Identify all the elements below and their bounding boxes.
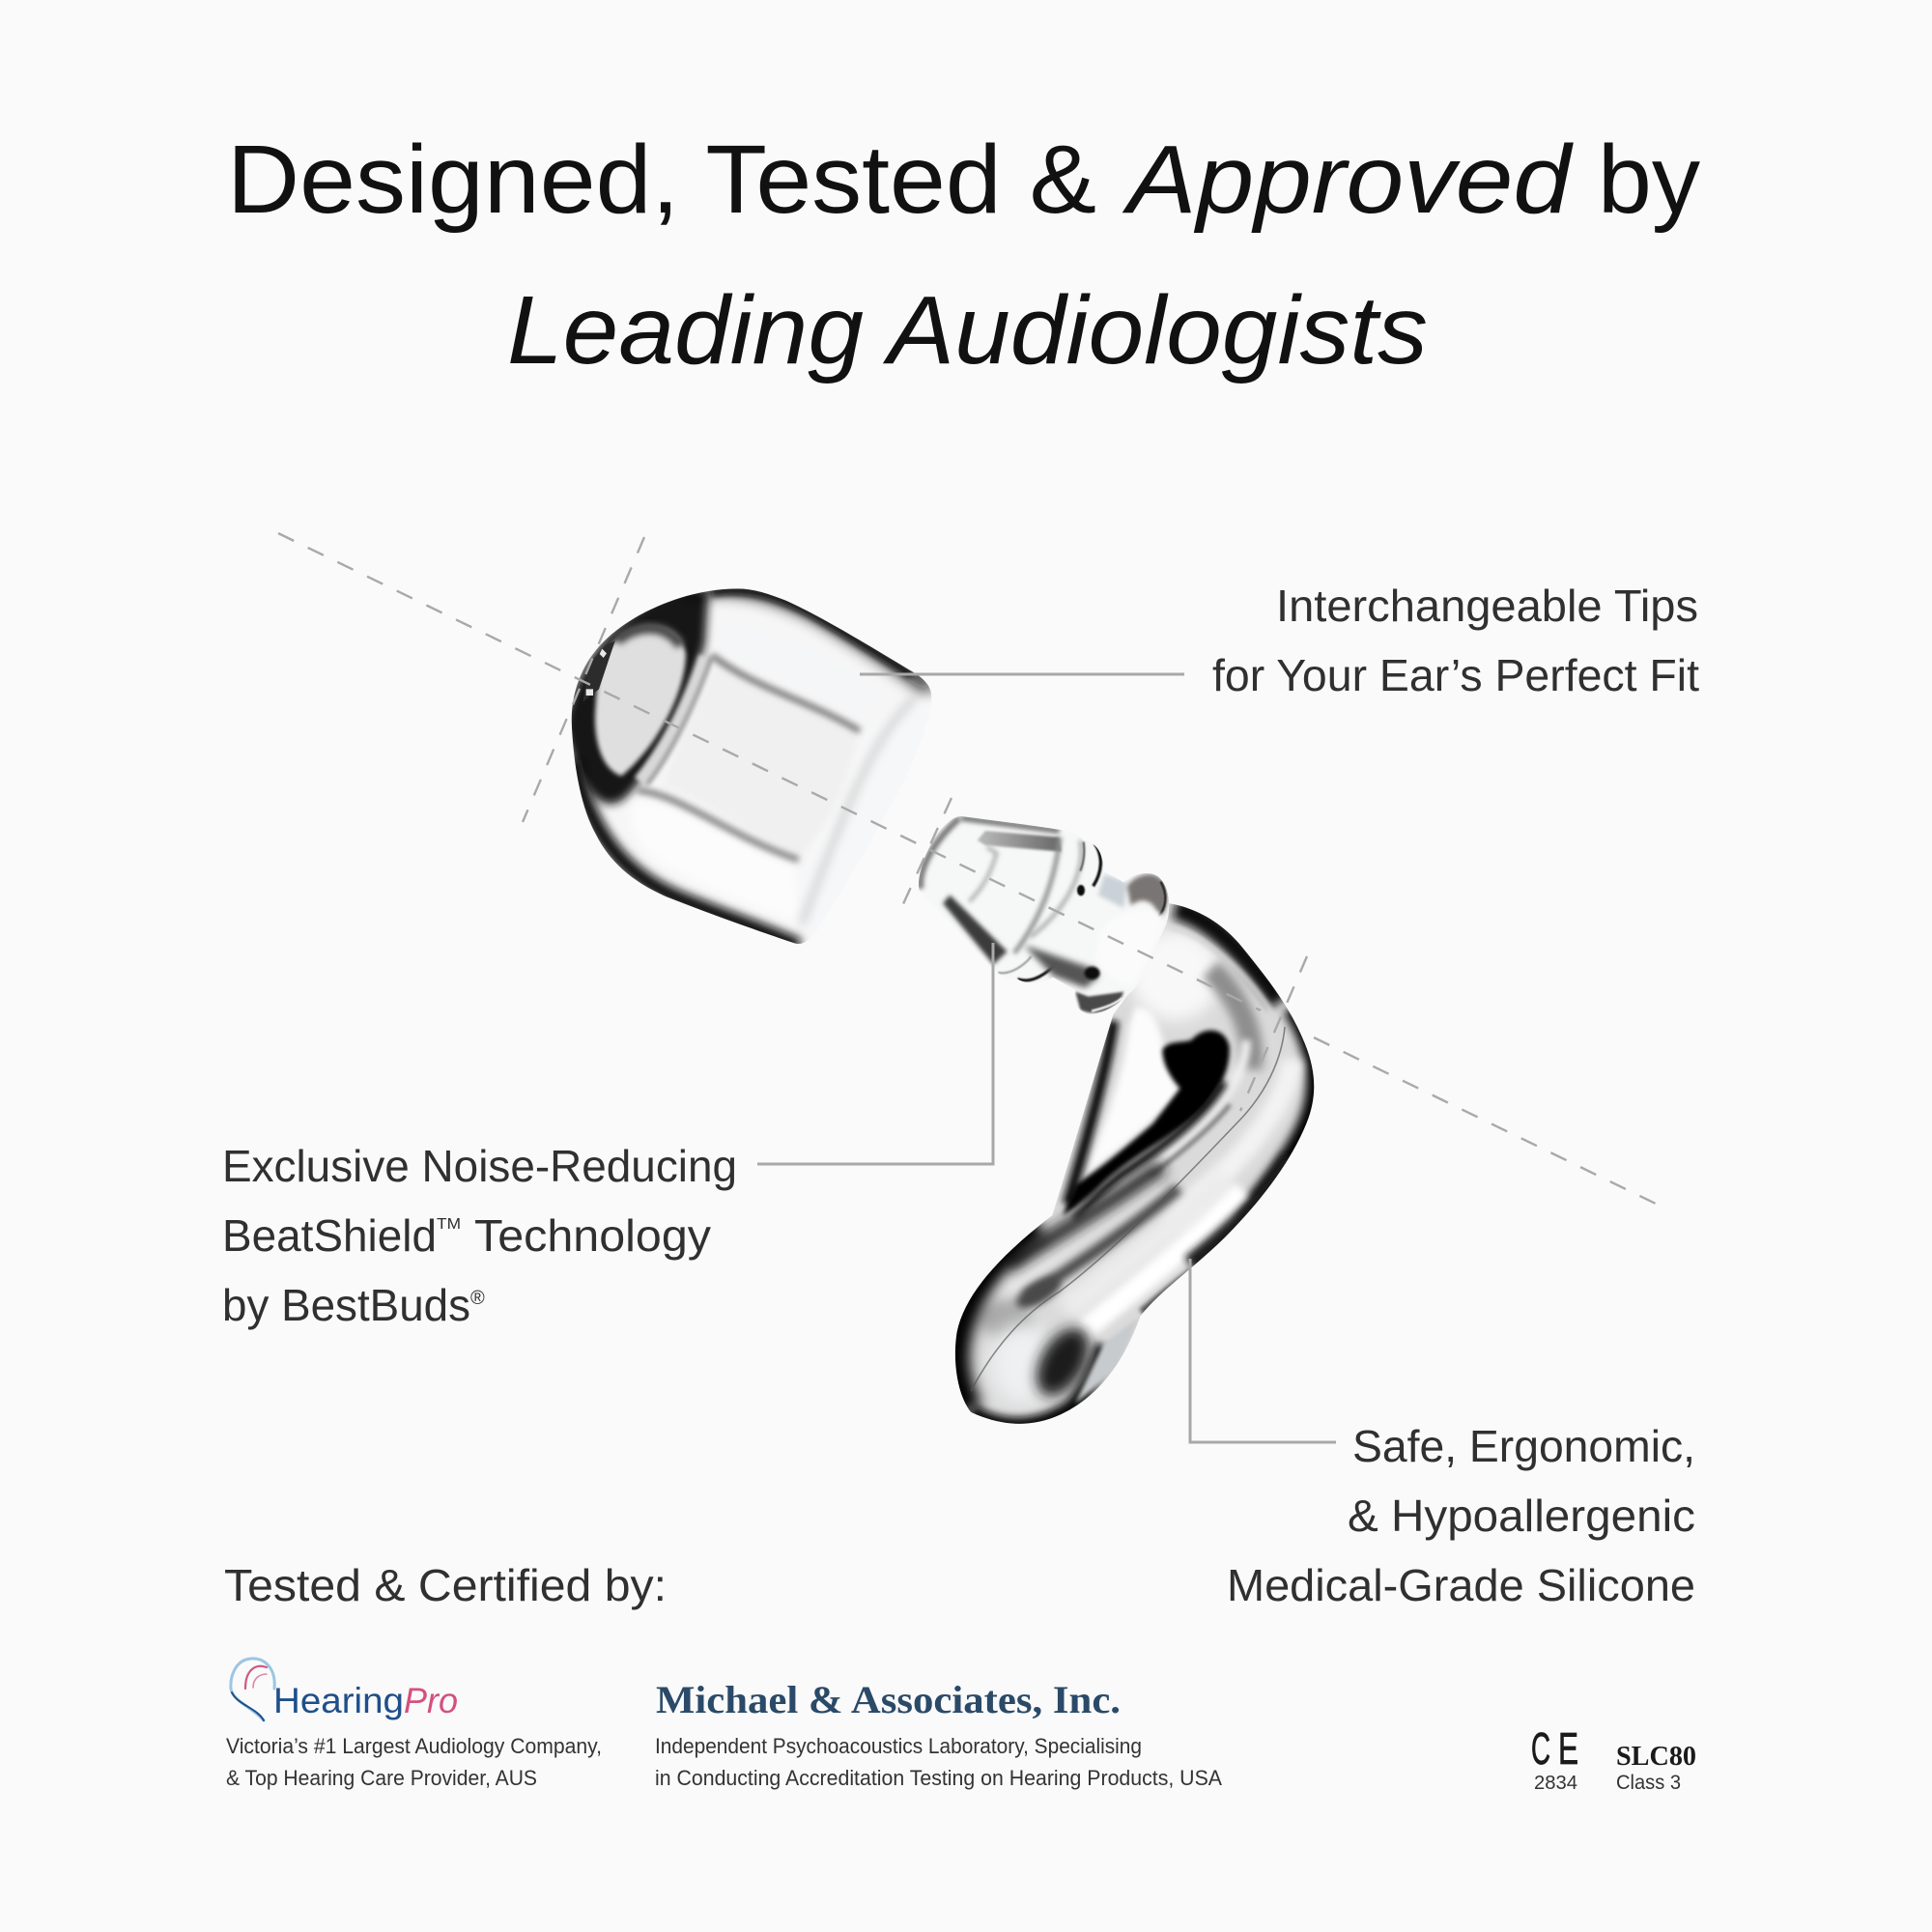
tip dark lower edge: [573, 760, 799, 947]
tip open end: [800, 703, 937, 944]
callout: interchangeable tips: for Your Ear’s Perfect Fit: [1212, 650, 1699, 700]
title line 2: Leading Audiologists: [507, 276, 1428, 384]
tip rim band: [640, 657, 707, 782]
body hook shading: [1210, 969, 1252, 1069]
body dark stripe: [1075, 1082, 1224, 1220]
tip dark upper rim: [712, 590, 911, 674]
logo: HearingPro: [231, 1659, 458, 1720]
callout: medical-grade silicone: Safe, Ergonomic,: [1352, 1421, 1695, 1471]
body rear fin: [1076, 1095, 1090, 1136]
lobe left dark edge: [956, 1225, 1038, 1410]
tip nose detail: [582, 640, 615, 702]
nozzle cone ring: [1014, 838, 1060, 953]
body outer band: [1185, 1055, 1310, 1197]
SLC80 rating: SLC80: [1616, 1741, 1696, 1772]
tip inner dome: [595, 626, 686, 776]
title line 1: Approved: [1122, 126, 1575, 234]
lobe mid grey: [978, 1299, 1032, 1338]
Michael & Associates description: Independent Psychoacoustics Laboratory, Specialising: [655, 1734, 1142, 1758]
nozzle stem: [1098, 874, 1127, 908]
callout: noise reducing technology: Technology: [474, 1210, 711, 1261]
title line 1: [227, 126, 1700, 234]
tip centre panel: [664, 664, 858, 857]
callout: medical-grade silicone: Medical-Grade Silicone: [1227, 1560, 1695, 1610]
illustration: clear nozzle: [911, 811, 1176, 1021]
lower underside edge: [1143, 1273, 1193, 1314]
lower grey stripe: [1027, 1188, 1179, 1297]
tip dome shadow: [563, 586, 708, 804]
HearingPro description: Victoria’s #1 Largest Audiology Company,: [226, 1734, 602, 1758]
CE mark: C: [1531, 1723, 1550, 1774]
tip creases: [712, 655, 860, 731]
body notch highlight: [1085, 1008, 1180, 1177]
tip dome top shading: [616, 628, 681, 645]
SLC80 rating: Class 3: [1616, 1772, 1681, 1794]
body seam: [971, 1027, 1285, 1391]
CE mark: 2834: [1534, 1773, 1577, 1794]
icon: ear swirl: [231, 1659, 274, 1720]
callout: noise reducing technology: BeatShield: [222, 1210, 437, 1261]
nozzle flange bottom: [1075, 992, 1123, 1012]
title line 1: Designed, Tested &: [227, 126, 1096, 234]
body shoulder highlight: [1130, 930, 1220, 1021]
body white strip: [1142, 1036, 1255, 1171]
dashed axis lines: [278, 533, 1658, 1205]
illustration: ear tip: [563, 580, 944, 953]
callout: noise reducing technology: ®: [470, 1288, 485, 1309]
lower light band: [1065, 1179, 1227, 1311]
nozzle dark lower strip: [943, 895, 1008, 964]
leader line: tip: [860, 672, 1184, 676]
callout: interchangeable tips: Interchangeable Tips: [1276, 581, 1698, 631]
callout: medical-grade silicone: & Hypoallergenic: [1348, 1491, 1695, 1541]
callout: noise reducing technology: [222, 1141, 737, 1330]
CE mark: E: [1558, 1723, 1578, 1774]
illustration: ear bud body: [954, 903, 1314, 1424]
body upper section: [1053, 908, 1315, 1227]
body left dark edge: [1067, 1021, 1114, 1205]
title: [227, 126, 1700, 384]
lobe highlight: [989, 1323, 1055, 1405]
SLC80 rating: [1616, 1741, 1696, 1794]
body shoulder dark band: [1176, 908, 1280, 1002]
callout: medical-grade silicone: [1227, 1421, 1695, 1610]
lower fin: [1075, 1317, 1140, 1404]
lower white strip: [995, 1175, 1157, 1296]
nozzle lower bar: [1024, 945, 1098, 988]
nozzle flange: [1127, 874, 1167, 919]
lobe dark blob: [1026, 1320, 1099, 1405]
HearingPro description: & Top Hearing Care Provider, AUS: [226, 1766, 537, 1790]
lobe bottom edge: [971, 1346, 1104, 1426]
tip top highlight: [715, 623, 886, 724]
nozzle left edge: [921, 818, 959, 889]
nozzle ridges: [1080, 842, 1084, 871]
nozzle top bar: [978, 831, 1061, 852]
Michael & Associates description: in Conducting Accreditation Testing on Hearing Products, USA: [655, 1766, 1222, 1790]
nozzle flange white: [1096, 910, 1163, 985]
body grey line: [1150, 1101, 1234, 1177]
lower dark stripe: [1008, 1166, 1162, 1265]
HearingPro description: [226, 1734, 602, 1790]
title line 1: by: [1598, 126, 1700, 234]
logo: HearingPro: Hearing: [273, 1681, 404, 1720]
callout: noise reducing technology: by BestBuds: [222, 1280, 470, 1330]
heading: tested and certified: Tested & Certified by:: [224, 1560, 667, 1610]
body outer dark edge: [1243, 1008, 1315, 1220]
tip dark upper edge: [686, 586, 930, 688]
logo: HearingPro: Pro: [404, 1681, 458, 1720]
lobe grey blob: [1011, 1270, 1065, 1315]
lower white band: [1085, 1191, 1243, 1330]
leader line: noise reducing filter: [757, 943, 993, 1164]
nozzle top edge: [961, 818, 1060, 831]
body lower section: [956, 1027, 1292, 1426]
nozzle inner block: [969, 847, 997, 901]
CE mark: [1531, 1723, 1578, 1794]
leader line: silicone: [1190, 1259, 1336, 1442]
nozzle black spot: [1077, 885, 1085, 895]
callout: noise reducing technology: Exclusive Noise-Reducing: [222, 1141, 737, 1191]
callout: noise reducing technology: TM: [437, 1216, 461, 1233]
Michael & Associates description: [655, 1734, 1222, 1790]
lower right dark edge: [1191, 1159, 1292, 1265]
nozzle lower ridge: [1017, 963, 1057, 980]
body dark hook blob: [1063, 1031, 1230, 1215]
logo: Michael & Associates: Michael & Associates, Inc.: [656, 1678, 1121, 1721]
tip lower highlight: [631, 800, 798, 923]
callout: interchangeable tips: [1212, 581, 1699, 700]
body inner shoulder line: [1179, 929, 1273, 1012]
